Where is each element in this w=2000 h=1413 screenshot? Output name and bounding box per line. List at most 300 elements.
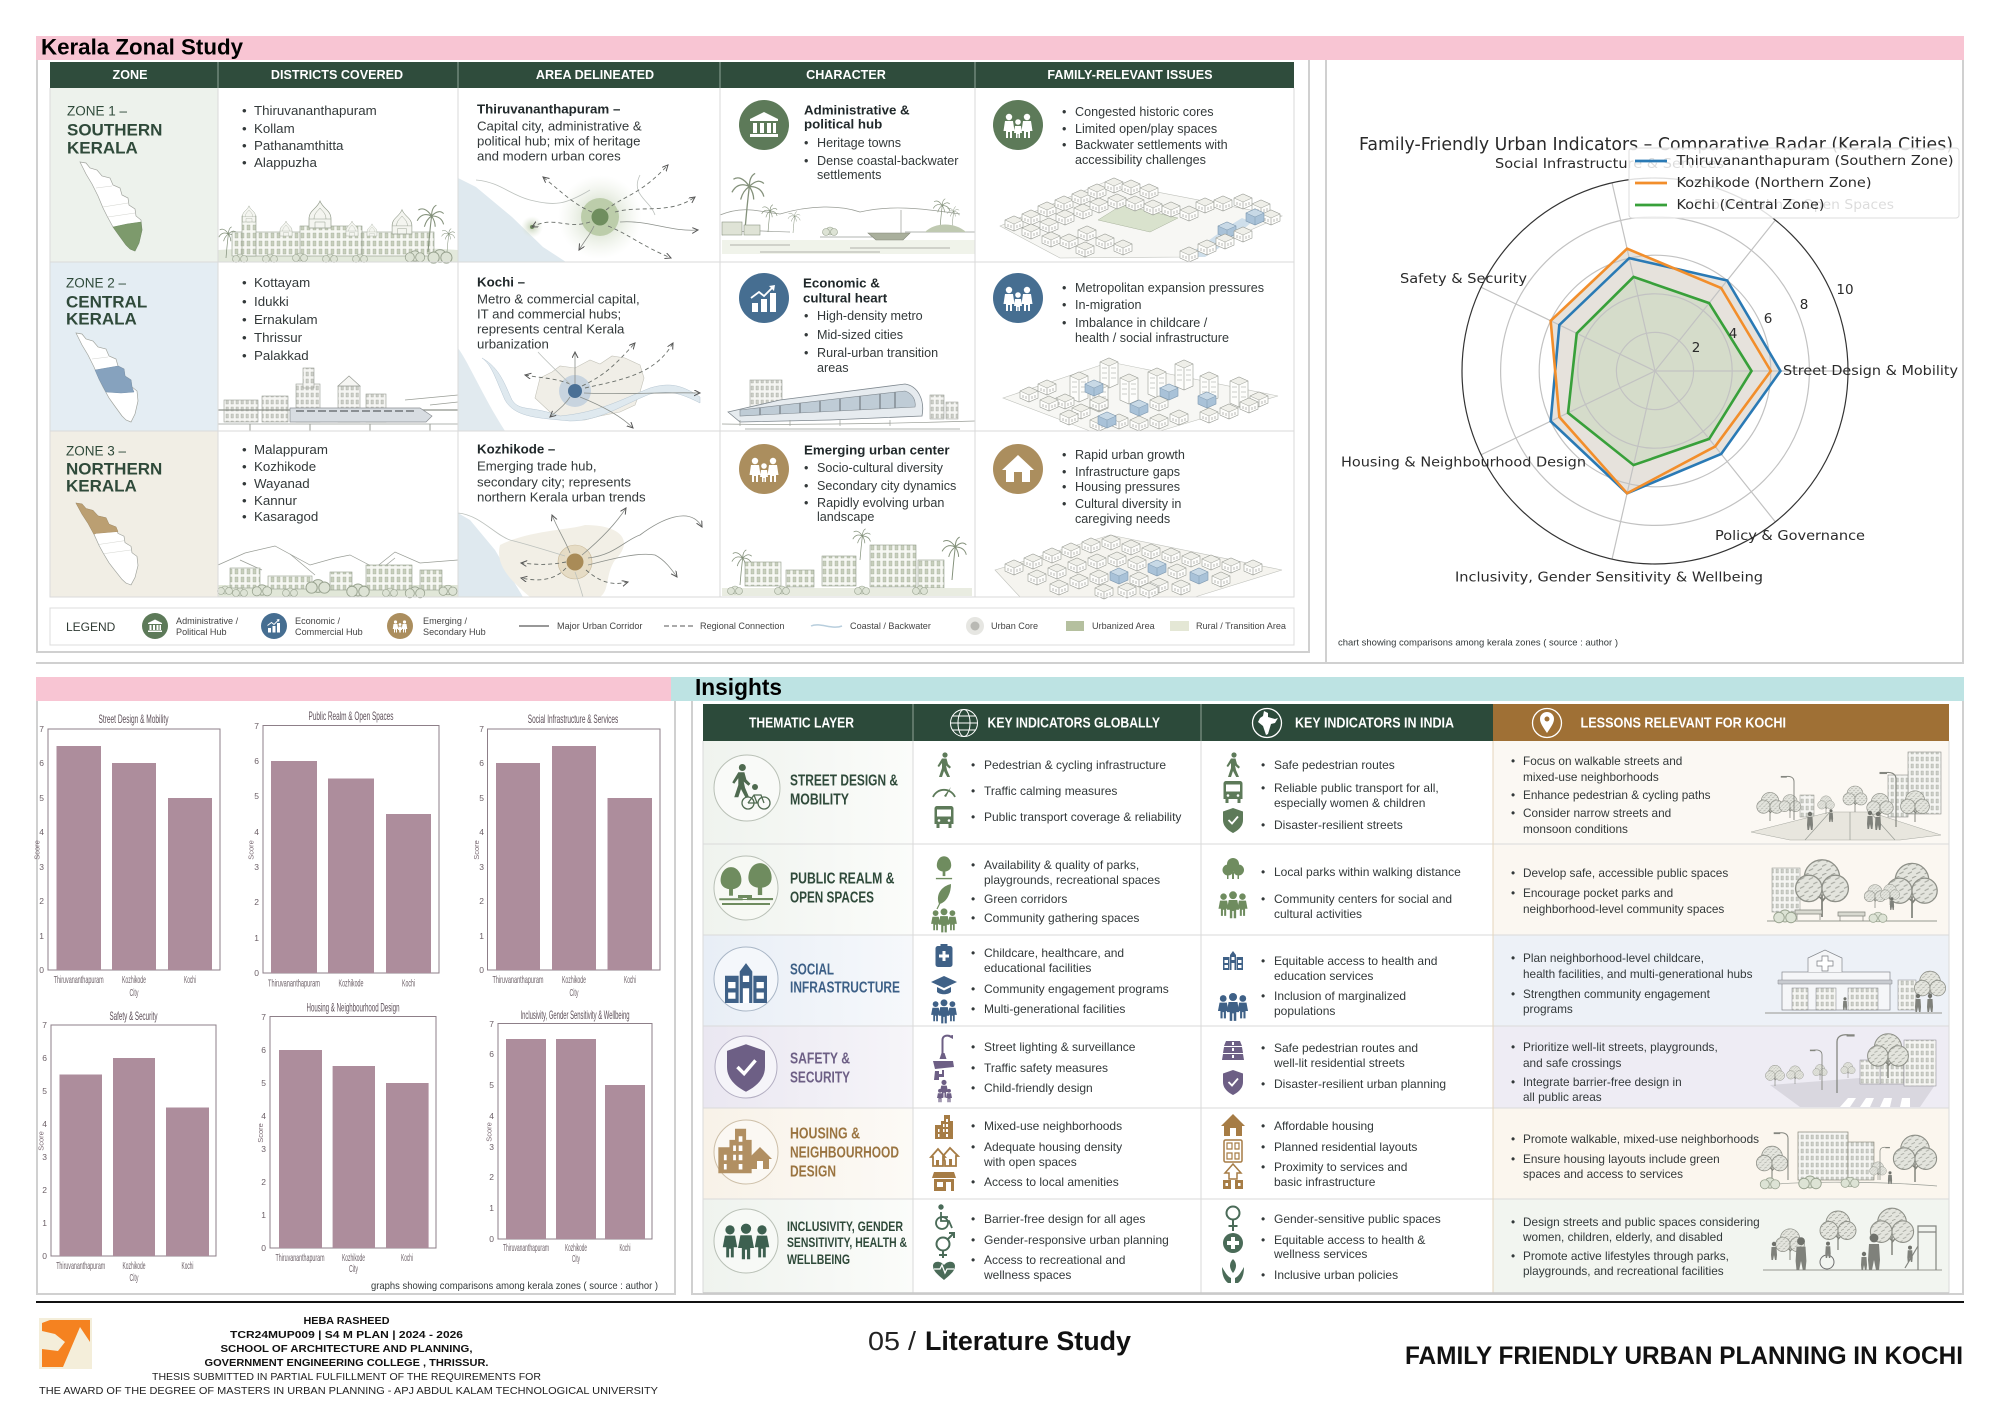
icon: economic hub bbox=[739, 273, 789, 323]
districts list bbox=[242, 274, 318, 362]
India indicators: Proximity to services and bbox=[1274, 1160, 1407, 1174]
bar chart: safety bbox=[36, 1009, 216, 1284]
lessons for Kochi bbox=[1511, 866, 1728, 916]
lessons for Kochi: Prioritize well-lit streets, playgrounds, bbox=[1523, 1040, 1718, 1054]
bar chart: public realm: Kozhikode bbox=[338, 978, 364, 990]
icon: location pin bbox=[1532, 708, 1562, 738]
global indicators: Childcare, healthcare, and bbox=[984, 946, 1124, 960]
bar chart: inclusivity: City bbox=[572, 1253, 580, 1265]
row: social infrastructure bbox=[714, 944, 1946, 1023]
theme label bbox=[790, 1126, 899, 1180]
zone 3 label: ZONE 3 – bbox=[66, 444, 127, 458]
global indicators: Access to recreational and bbox=[984, 1253, 1125, 1267]
bar chart: street design: Street Design & Mobility bbox=[98, 712, 168, 726]
radial tick numbers: 4 bbox=[1729, 326, 1737, 342]
radial tick numbers: 10 bbox=[1836, 282, 1854, 298]
bar chart: inclusivity: Inclusivity, Gender Sensitivity & Wellbeing bbox=[520, 1008, 630, 1022]
heading band: Insights: Insights bbox=[695, 674, 782, 700]
radar axis labels: Safety & Security bbox=[1400, 271, 1527, 287]
theme label: DESIGN bbox=[790, 1164, 836, 1180]
icon: administrative hub bbox=[739, 100, 789, 150]
bar chart: safety: 2 bbox=[42, 1185, 47, 1195]
author and thesis block: SCHOOL OF ARCHITECTURE AND PLANNING, bbox=[220, 1343, 473, 1355]
author and thesis block: THESIS SUBMITTED IN PARTIAL FULFILLMENT OF THE REQUIREMENTS FOR bbox=[152, 1371, 541, 1383]
India indicators: Equitable access to health and bbox=[1274, 954, 1437, 968]
bar chart: safety: City bbox=[130, 1272, 139, 1284]
global indicators: Public transport coverage & reliability bbox=[984, 810, 1181, 824]
India indicators: Reliable public transport for all, bbox=[1274, 781, 1439, 795]
sketch: hills and town bbox=[218, 546, 458, 598]
character text: emerging centre: • bbox=[804, 461, 808, 475]
sketch: mixed-use housing bbox=[1756, 1132, 1937, 1189]
area description: Kozhikode bbox=[477, 442, 646, 504]
global indicators: educational facilities bbox=[984, 961, 1091, 975]
map diagram: Thiruvananthapuram corridors bbox=[458, 165, 698, 262]
bar chart: housing: 2 bbox=[261, 1177, 266, 1187]
icon: emerging hub bbox=[739, 444, 789, 494]
lessons for Kochi: • bbox=[1511, 866, 1515, 880]
row: street design and mobility bbox=[714, 752, 1941, 840]
India indicators: Inclusion of marginalized bbox=[1274, 989, 1406, 1003]
table header: KEY INDICATORS GLOBALLY bbox=[988, 714, 1160, 732]
table: thematic insights bbox=[703, 704, 1949, 1293]
India indicators bbox=[1218, 858, 1461, 921]
project title: FAMILY FRIENDLY URBAN PLANNING IN KOCHI bbox=[1405, 1342, 1963, 1370]
character text: administrative hub bbox=[804, 102, 958, 182]
issues list: Limited open/play spaces bbox=[1075, 122, 1217, 136]
lessons for Kochi: Promote walkable, mixed-use neighborhoods bbox=[1523, 1132, 1759, 1146]
character text: economic heart: Economic & bbox=[803, 276, 880, 290]
bar chart: street design: Kozhikode bbox=[122, 974, 146, 986]
zone 1 label: ZONE 1 – bbox=[67, 104, 128, 118]
character text: economic heart: • bbox=[804, 346, 808, 360]
row: public realm and open spaces bbox=[714, 856, 1937, 932]
lessons for Kochi: Consider narrow streets and bbox=[1523, 806, 1671, 820]
issues list: • bbox=[1062, 105, 1066, 119]
bar chart: public realm: 4 bbox=[254, 827, 259, 837]
bar chart: public realm: 0 bbox=[254, 968, 259, 978]
India indicators: Safe pedestrian routes bbox=[1274, 758, 1395, 772]
bar chart: inclusivity: 4 bbox=[489, 1111, 494, 1121]
lessons for Kochi: • bbox=[1511, 1132, 1515, 1146]
area description: Kochi: Metro & commercial capital, bbox=[477, 292, 640, 306]
zone 2 label: KERALA bbox=[66, 310, 137, 328]
global indicators: Multi-generational facilities bbox=[984, 1002, 1125, 1016]
legend bar: Economic / bbox=[295, 616, 340, 626]
bar chart: inclusivity: 3 bbox=[489, 1142, 494, 1152]
author and thesis block: HEBA RASHEED bbox=[304, 1315, 390, 1327]
table header row: FAMILY-RELEVANT ISSUES bbox=[1047, 68, 1213, 82]
issues list: Rapid urban growth bbox=[1075, 448, 1185, 462]
zone cell backgrounds bbox=[50, 88, 218, 597]
issues list: • bbox=[1062, 138, 1066, 152]
zone 2 label: CENTRAL bbox=[66, 292, 147, 312]
row: inclusivity, gender sensitivity, health and wellbeing bbox=[714, 1205, 1942, 1283]
theme icon: pedestrian and cycle bbox=[714, 755, 780, 821]
issues list: Infrastructure gaps bbox=[1075, 465, 1180, 479]
bar chart: street design: 1 bbox=[39, 931, 44, 941]
bar chart: inclusivity: Thiruvananthapuram bbox=[503, 1242, 549, 1254]
bar chart: public realm: 7 bbox=[254, 721, 259, 731]
bar chart: street design: Score bbox=[32, 840, 42, 860]
theme label: SECURITY bbox=[790, 1070, 851, 1086]
sketch: coastal town bbox=[722, 529, 972, 596]
bar chart: social infrastructure: Thiruvananthapuram bbox=[492, 974, 544, 986]
bar chart: housing: City bbox=[349, 1263, 358, 1275]
global indicators: Adequate housing density bbox=[984, 1140, 1122, 1154]
India indicators: Disaster-resilient streets bbox=[1274, 818, 1403, 832]
sketch: inclusive park bbox=[1763, 1208, 1942, 1270]
legend bar: Coastal / Backwater bbox=[850, 621, 931, 631]
India indicators: • bbox=[1261, 1119, 1265, 1133]
table header row: CHARACTER bbox=[806, 68, 886, 82]
India indicators bbox=[1222, 1041, 1446, 1095]
India indicators: populations bbox=[1274, 1004, 1335, 1018]
area description: Thiruvananthapuram: Thiruvananthapuram – bbox=[477, 102, 620, 116]
bar chart: safety: Score bbox=[36, 1131, 46, 1151]
theme label bbox=[790, 1050, 851, 1086]
theme label: OPEN SPACES bbox=[790, 890, 874, 906]
global indicators: • bbox=[971, 946, 975, 960]
bar chart: public realm: 5 bbox=[254, 791, 259, 801]
sketch: backwater landscape bbox=[720, 173, 975, 254]
table header: THEMATIC LAYER bbox=[749, 714, 854, 732]
row: housing and neighbourhood design bbox=[714, 1114, 1937, 1191]
radar plot bbox=[1462, 178, 1848, 564]
bar chart: safety: 4 bbox=[42, 1119, 47, 1129]
map diagram: Kozhikode corridors bbox=[458, 508, 702, 597]
legend bar: Secondary Hub bbox=[423, 627, 486, 637]
India indicators bbox=[1223, 752, 1439, 833]
sketch: growing neighbourhood bbox=[995, 535, 1282, 599]
global indicators bbox=[931, 856, 1160, 932]
bar chart: street design: 4 bbox=[39, 827, 44, 837]
theme label: WELLBEING bbox=[787, 1251, 850, 1267]
India indicators: Safe pedestrian routes and bbox=[1274, 1041, 1418, 1055]
lessons for Kochi: • bbox=[1511, 987, 1515, 1001]
bar chart: social infrastructure: 0 bbox=[479, 965, 484, 975]
legend icon: administrative bbox=[142, 613, 168, 639]
global indicators bbox=[931, 1115, 1122, 1191]
global indicators: Green corridors bbox=[984, 892, 1067, 906]
legend bar: LEGEND bbox=[66, 620, 116, 634]
bar chart: street design: 6 bbox=[39, 758, 44, 768]
lessons for Kochi bbox=[1511, 1040, 1718, 1104]
India indicators: well-lit residential streets bbox=[1273, 1056, 1405, 1070]
districts list: Ernakulam bbox=[254, 312, 318, 326]
sketch: dense urban block bbox=[1000, 178, 1282, 262]
districts list bbox=[242, 102, 377, 170]
global indicators: Availability & quality of parks, bbox=[984, 858, 1139, 872]
table header: KEY INDICATORS IN INDIA bbox=[1295, 714, 1454, 732]
legend icon: emerging bbox=[387, 613, 413, 639]
legend line: corridor bbox=[519, 625, 549, 627]
India indicators: education services bbox=[1274, 969, 1373, 983]
bar chart: public realm: Score bbox=[246, 840, 256, 860]
districts list: Thiruvananthapuram bbox=[254, 102, 377, 118]
bar chart: social infrastructure: 2 bbox=[479, 896, 484, 906]
legend bar: Major Urban Corridor bbox=[557, 621, 642, 631]
radar legend: Kozhikode (Northern Zone) bbox=[1676, 175, 1872, 191]
global indicators: • bbox=[971, 892, 975, 906]
theme label bbox=[787, 1218, 907, 1267]
bar chart: safety: 7 bbox=[42, 1020, 47, 1030]
character text: emerging centre: • bbox=[804, 496, 808, 510]
lessons for Kochi: health facilities, and multi-generational hubs bbox=[1523, 967, 1753, 981]
zone 2 label bbox=[66, 276, 147, 328]
radar legend bbox=[1629, 148, 1959, 218]
global indicators: Child-friendly design bbox=[984, 1081, 1093, 1095]
global indicators: Barrier-free design for all ages bbox=[984, 1212, 1145, 1226]
area description: Thiruvananthapuram: Capital city, administrative & bbox=[477, 118, 642, 134]
issues list: Congested historic cores bbox=[1075, 105, 1214, 119]
districts list: • bbox=[242, 442, 247, 456]
legend line: regional bbox=[664, 625, 694, 627]
global indicators: Street lighting & surveillance bbox=[984, 1040, 1136, 1054]
zone 3 label: KERALA bbox=[66, 476, 137, 496]
bar chart: social infrastructure: 3 bbox=[479, 862, 484, 872]
districts list: • bbox=[242, 492, 247, 508]
issues list: Imbalance in childcare / bbox=[1075, 316, 1208, 330]
sketch: safe crossing bbox=[1765, 1034, 1936, 1107]
lessons for Kochi: Encourage pocket parks and bbox=[1523, 886, 1673, 900]
global indicators: • bbox=[971, 1081, 975, 1095]
sketch: metro train bbox=[722, 380, 975, 429]
radar legend: Kochi (Central Zone) bbox=[1676, 197, 1824, 213]
issues list: Metropolitan expansion pressures bbox=[1075, 281, 1264, 295]
bar chart: inclusivity: 5 bbox=[489, 1080, 494, 1090]
row 3: Northern Kerala bbox=[66, 442, 1282, 599]
issues list: • bbox=[1062, 281, 1066, 295]
districts list: Kollam bbox=[254, 120, 295, 136]
radar axis labels: Public Realm & Open Spaces bbox=[1694, 197, 1894, 213]
row: safety and security bbox=[715, 1034, 1936, 1107]
footer rule bbox=[36, 1301, 1964, 1303]
issues list: accessibility challenges bbox=[1075, 153, 1206, 167]
theme label: HOUSING & bbox=[790, 1126, 860, 1142]
global indicators: Traffic calming measures bbox=[984, 784, 1117, 798]
legend line: coastal bbox=[811, 625, 842, 627]
area description: Kozhikode: secondary city; represents bbox=[477, 474, 631, 490]
character text: economic heart: Rural-urban transition bbox=[817, 346, 938, 360]
bar chart: inclusivity: Kozhikode bbox=[565, 1242, 587, 1254]
bar chart: social infrastructure bbox=[472, 712, 660, 999]
bar chart: street design: 0 bbox=[39, 965, 44, 975]
bar chart: housing: Score bbox=[256, 1123, 265, 1143]
bar chart: social infrastructure: 6 bbox=[479, 758, 484, 768]
India indicators: Disaster-resilient urban planning bbox=[1274, 1077, 1446, 1091]
radar axis labels: Street Design & Mobility bbox=[1783, 363, 1958, 379]
panel band: lower-left pink bbox=[36, 677, 671, 701]
character text: emerging centre: landscape bbox=[817, 510, 874, 524]
districts list bbox=[242, 442, 328, 524]
issues list bbox=[1062, 281, 1264, 345]
India indicators: • bbox=[1261, 1268, 1265, 1282]
global indicators: with open spaces bbox=[983, 1155, 1077, 1169]
bar chart: safety: 6 bbox=[42, 1053, 47, 1063]
area description: Kochi: urbanization bbox=[477, 336, 549, 352]
issues list: caregiving needs bbox=[1075, 512, 1170, 526]
India indicators: • bbox=[1261, 1233, 1265, 1247]
bar chart: inclusivity: 6 bbox=[489, 1049, 494, 1059]
global indicators: • bbox=[971, 1212, 975, 1226]
row 2: Central Kerala bbox=[66, 273, 1278, 431]
districts list: • bbox=[242, 348, 247, 362]
sketch: metro skyline bbox=[218, 368, 458, 431]
India indicators: especially women & children bbox=[1274, 796, 1425, 810]
districts list: Wayanad bbox=[254, 476, 310, 490]
districts list: Kottayam bbox=[254, 274, 310, 290]
bar chart: street design bbox=[32, 712, 220, 999]
theme label: SAFETY & bbox=[790, 1050, 850, 1068]
global indicators: playgrounds, recreational spaces bbox=[984, 873, 1160, 887]
map: northern Kerala bbox=[76, 503, 138, 585]
theme label: NEIGHBOURHOOD bbox=[790, 1144, 899, 1162]
India indicators: Affordable housing bbox=[1274, 1119, 1374, 1133]
global indicators: • bbox=[971, 784, 975, 798]
radial tick numbers: 8 bbox=[1800, 297, 1808, 313]
legend bar: Rural / Transition Area bbox=[1196, 621, 1287, 631]
bar chart: safety: Kozhikode bbox=[122, 1260, 146, 1272]
lessons for Kochi: neighborhood-level community spaces bbox=[1523, 902, 1724, 916]
zone 1 label bbox=[67, 104, 162, 158]
sketch: metro expansion block bbox=[1003, 358, 1278, 431]
character text: economic heart: Mid-sized cities bbox=[817, 328, 903, 342]
bar chart: inclusivity: 1 bbox=[489, 1203, 494, 1213]
issues list: • bbox=[1062, 122, 1066, 136]
author and thesis block bbox=[39, 1315, 658, 1397]
bar chart: street design: 7 bbox=[39, 724, 44, 734]
India indicators: Gender-sensitive public spaces bbox=[1274, 1212, 1441, 1226]
districts list: Kasaragod bbox=[254, 508, 318, 524]
global indicators: • bbox=[971, 1140, 975, 1154]
bar chart: public realm: Kochi bbox=[402, 978, 415, 990]
issues list: • bbox=[1062, 480, 1066, 494]
global indicators: Traffic safety measures bbox=[984, 1061, 1108, 1075]
bar chart: inclusivity: 7 bbox=[489, 1019, 494, 1029]
global indicators: • bbox=[971, 810, 975, 824]
lessons for Kochi: Develop safe, accessible public spaces bbox=[1523, 866, 1728, 880]
bar chart: housing: Housing & Neighbourhood Design bbox=[306, 1000, 400, 1014]
table header row: DISTRICTS COVERED bbox=[271, 68, 403, 82]
bar chart: social infrastructure: 1 bbox=[479, 931, 484, 941]
legend swatch: rural bbox=[1170, 621, 1189, 631]
character text: economic heart: • bbox=[804, 309, 808, 323]
bar chart: safety: 5 bbox=[42, 1086, 47, 1096]
bar chart: public realm: 6 bbox=[254, 756, 259, 766]
character text: administrative hub: settlements bbox=[817, 168, 881, 182]
radar axis labels: Housing & Neighbourhood Design bbox=[1341, 454, 1586, 470]
districts list: • bbox=[242, 312, 247, 326]
character text: economic heart: cultural heart bbox=[803, 290, 888, 306]
lessons for Kochi: Integrate barrier-free design in bbox=[1523, 1075, 1682, 1089]
global indicators: • bbox=[971, 1061, 975, 1075]
bar charts caption: graphs showing comparisons among kerala zones ( source : author ) bbox=[371, 1280, 658, 1292]
India indicators: • bbox=[1261, 818, 1265, 832]
bar chart: social infrastructure: 7 bbox=[479, 724, 484, 734]
legend bar: Political Hub bbox=[176, 627, 227, 637]
theme label: SOCIAL bbox=[790, 962, 834, 978]
lessons for Kochi: Plan neighborhood-level childcare, bbox=[1523, 951, 1704, 965]
India indicators: • bbox=[1261, 892, 1265, 906]
districts list: • bbox=[242, 330, 247, 344]
global indicators: Pedestrian & cycling infrastructure bbox=[984, 758, 1166, 772]
bar chart: public realm: 1 bbox=[254, 933, 259, 943]
area description: Kochi: IT and commercial hubs; bbox=[477, 306, 621, 322]
area description: Thiruvananthapuram: and modern urban cores bbox=[477, 148, 621, 164]
sheet number and section title: Literature Study bbox=[925, 1326, 1131, 1356]
heading band: Insights bbox=[671, 674, 1964, 701]
India indicators: basic infrastructure bbox=[1274, 1175, 1376, 1189]
bar chart: public realm: 3 bbox=[254, 862, 259, 872]
bar chart: inclusivity: 0 bbox=[489, 1234, 494, 1244]
global indicators: • bbox=[971, 982, 975, 996]
map: central Kerala bbox=[76, 333, 138, 422]
area description: Kochi: Kochi – bbox=[477, 274, 525, 290]
character text: economic heart bbox=[803, 276, 938, 375]
global indicators: • bbox=[971, 1002, 975, 1016]
legend swatch: urbanized bbox=[1066, 621, 1084, 631]
heading band: Kerala Zonal Study bbox=[36, 34, 1964, 60]
legend bar: Commercial Hub bbox=[295, 627, 363, 637]
India indicators: • bbox=[1261, 1041, 1265, 1055]
India indicators: • bbox=[1261, 1160, 1265, 1174]
bar chart: social infrastructure: Social Infrastructure & Services bbox=[528, 712, 618, 726]
bar chart: safety: Kochi bbox=[182, 1260, 194, 1272]
bar chart: social infrastructure: Kozhikode bbox=[562, 974, 586, 986]
bar chart: housing: Kozhikode bbox=[342, 1252, 365, 1264]
row 1: Southern Kerala bbox=[67, 100, 1282, 263]
theme icon: housing bbox=[714, 1120, 778, 1184]
lessons for Kochi: and safe crossings bbox=[1523, 1056, 1621, 1070]
India indicators: • bbox=[1261, 781, 1265, 795]
bar chart: social infrastructure: Score bbox=[472, 840, 481, 860]
table grid bbox=[703, 741, 1949, 1293]
India indicators: Planned residential layouts bbox=[1274, 1140, 1417, 1154]
issues list: Cultural diversity in bbox=[1075, 497, 1181, 511]
theme label: INCLUSIVITY, GENDER bbox=[787, 1218, 903, 1234]
character text: emerging centre: Socio-cultural diversity bbox=[817, 461, 944, 475]
districts list: Thrissur bbox=[254, 330, 303, 344]
character text: economic heart: areas bbox=[817, 361, 849, 375]
districts list: • bbox=[242, 476, 247, 490]
zone 1 label: SOUTHERN bbox=[67, 120, 162, 140]
India indicators bbox=[1222, 1206, 1441, 1283]
bar chart: public realm bbox=[246, 709, 439, 990]
lessons for Kochi: • bbox=[1511, 951, 1515, 965]
districts list: Palakkad bbox=[254, 348, 309, 362]
lessons for Kochi: • bbox=[1511, 754, 1515, 768]
global indicators: • bbox=[971, 758, 975, 772]
lessons for Kochi: monsoon conditions bbox=[1523, 822, 1628, 836]
character text: administrative hub: Dense coastal-backwater bbox=[817, 154, 958, 168]
zone 3 label: NORTHERN bbox=[66, 460, 162, 478]
lessons for Kochi: • bbox=[1511, 1152, 1515, 1166]
panel: bar charts bbox=[32, 709, 660, 1292]
lessons for Kochi: • bbox=[1511, 806, 1515, 820]
radar caption: chart showing comparisons among kerala zones ( source : author ) bbox=[1338, 638, 1618, 648]
lessons for Kochi: mixed-use neighborhoods bbox=[1523, 770, 1659, 784]
character text: emerging centre: Emerging urban center bbox=[804, 442, 950, 458]
table header bbox=[703, 704, 1949, 741]
character text: administrative hub: Administrative & bbox=[804, 102, 910, 118]
bar chart: street design: 5 bbox=[39, 793, 44, 803]
radial tick numbers: 6 bbox=[1764, 311, 1772, 327]
author and thesis block: GOVERNMENT ENGINEERING COLLEGE , THRISSUR. bbox=[204, 1357, 489, 1369]
row backgrounds bbox=[703, 741, 1949, 1293]
theme label bbox=[790, 772, 898, 808]
radial tick numbers bbox=[1692, 282, 1854, 356]
